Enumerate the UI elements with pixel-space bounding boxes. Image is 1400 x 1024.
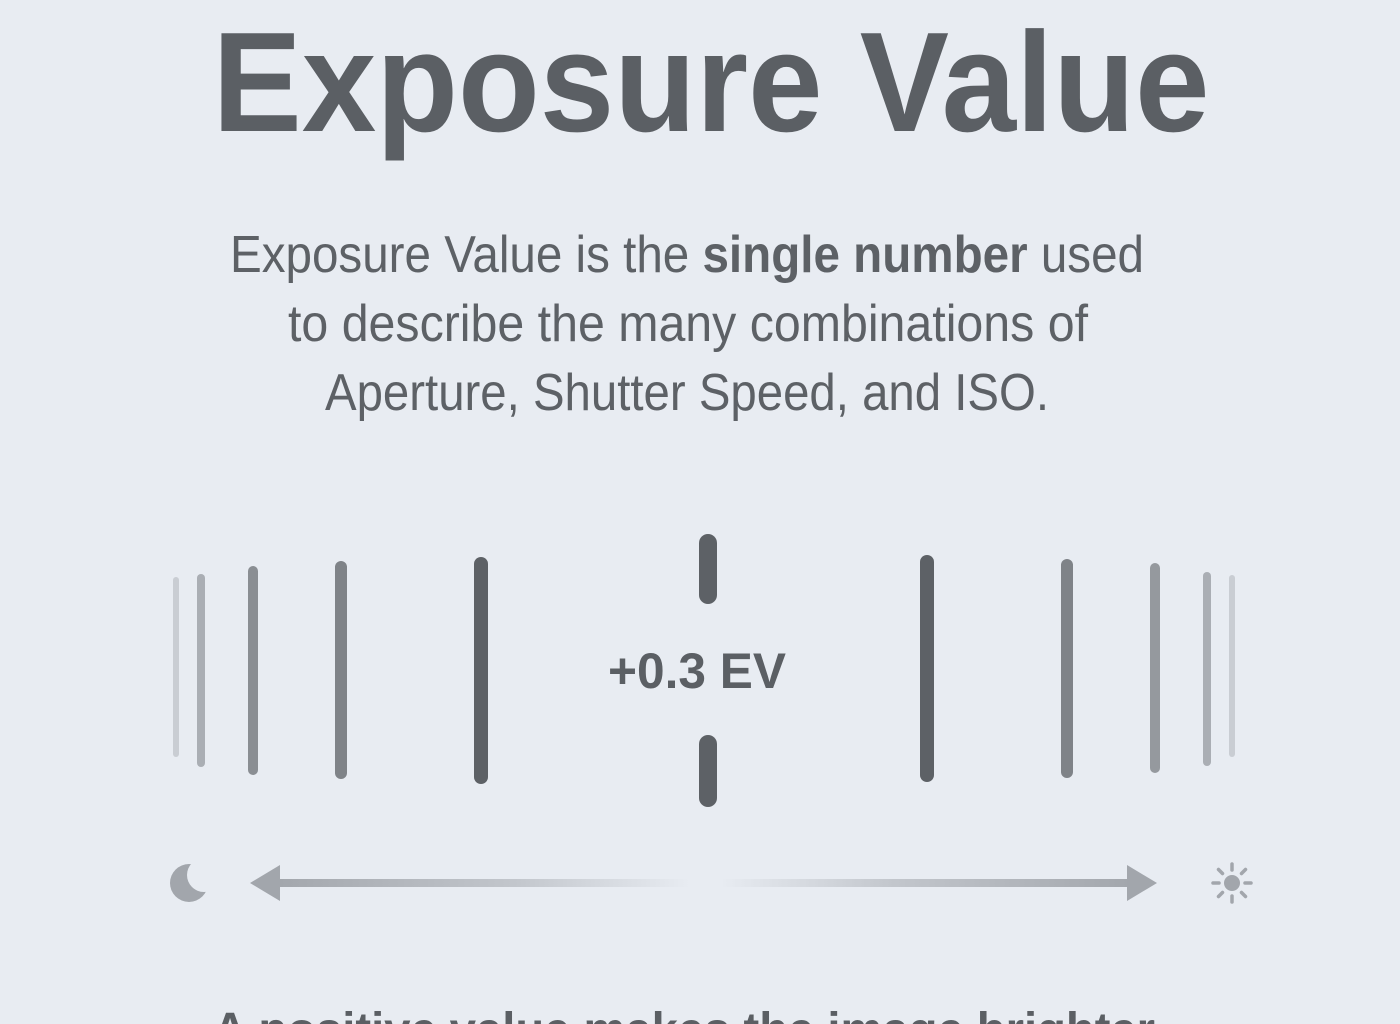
icon: sun (1213, 864, 1251, 902)
description text: Aperture, Shutter Speed, and ISO. (325, 364, 1049, 422)
description text (230, 226, 1144, 422)
icon: moon (170, 864, 208, 902)
description text: to describe the many combinations of (288, 295, 1089, 353)
arrow: darker to brighter (250, 865, 1157, 901)
EV scale ticks (176, 543, 1232, 798)
description text: Exposure Value is the single number used (230, 226, 1144, 284)
EV value label: +0.3 EV (608, 643, 787, 699)
title: Exposure Value (212, 3, 1210, 162)
